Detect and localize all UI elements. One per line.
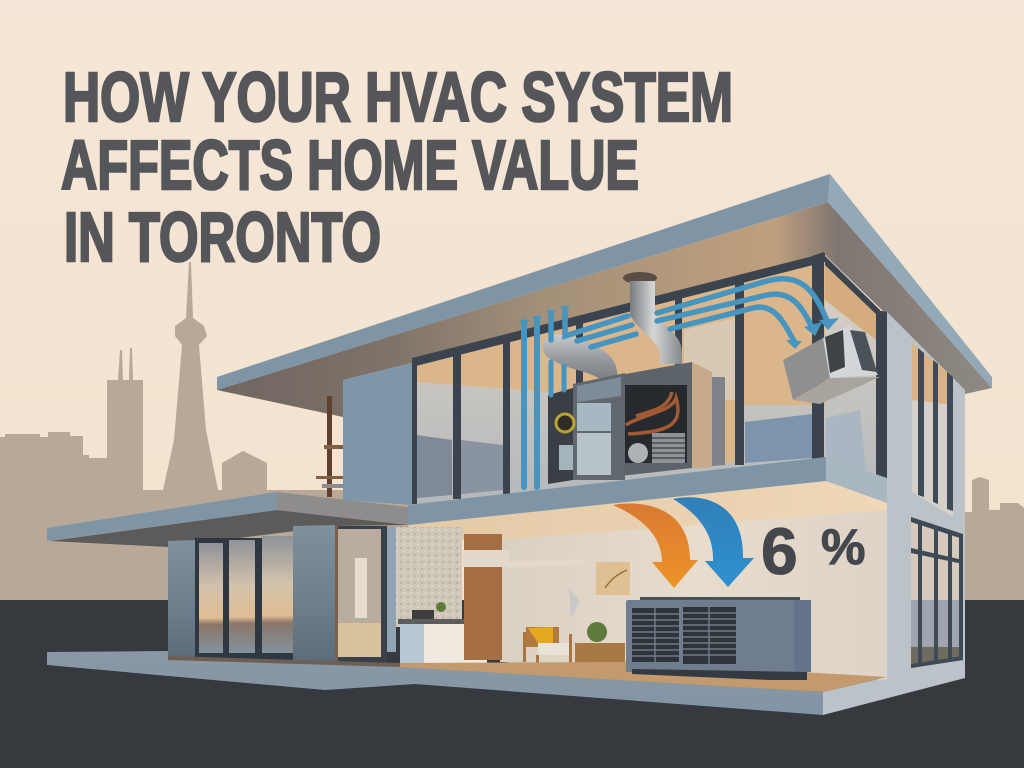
percentage text: %: [821, 519, 865, 575]
window mullions: [412, 252, 887, 504]
wood panel: [464, 534, 502, 660]
background sky: [0, 0, 1024, 600]
blue arrow down: [673, 497, 754, 587]
left canopy: [47, 492, 408, 547]
lower ceiling: [408, 481, 887, 540]
kitchen shelf plant: [398, 602, 488, 624]
compressor sphere: [628, 443, 648, 463]
mid slab right side: [826, 457, 887, 503]
cabinet grille: [652, 433, 685, 463]
furnace unit: [543, 272, 725, 484]
condenser right end panel: [794, 600, 811, 672]
condenser top: [640, 597, 800, 600]
upper floor gray wall block: [343, 363, 412, 505]
slab body: [47, 651, 823, 715]
front panels: [559, 373, 625, 480]
condenser left grille: [632, 608, 679, 662]
lower side windows: [911, 517, 963, 668]
armchair: [523, 627, 572, 663]
floor slab: [47, 651, 887, 715]
blue air ducts: [524, 279, 827, 487]
percentage text: 6: [761, 514, 798, 588]
upper side windows: [912, 343, 953, 517]
blue wall strip: [387, 527, 396, 652]
title: IN TORONTO: [64, 198, 381, 276]
condenser base: [632, 669, 807, 680]
title: AFFECTS HOME VALUE: [61, 126, 639, 204]
framed wall art: [596, 562, 630, 595]
roof soffit: [217, 202, 992, 417]
furnace right beige panel: [692, 362, 712, 468]
duct arrow tips: [519, 306, 839, 349]
balcony rack: [316, 396, 343, 497]
wall air handler: [783, 325, 880, 404]
orange arrow down: [613, 504, 698, 588]
upper windows glazing: [412, 255, 887, 505]
furnace right cabinet: [620, 362, 692, 476]
upper room interior furniture: [417, 410, 866, 498]
kitchen counter: [400, 624, 487, 663]
burner cabinet interior: [625, 385, 687, 463]
corner glazing with sofa: [335, 526, 387, 662]
furnace right gray side: [712, 377, 725, 466]
house cutaway: [47, 174, 992, 715]
outdoor condenser unit: [626, 597, 811, 680]
condenser body: [626, 600, 811, 672]
ground band: [0, 600, 1024, 768]
lower left walls: [168, 540, 195, 658]
roof right fascia: [828, 174, 992, 388]
roof front fascia: [217, 174, 830, 390]
porch wood edge: [168, 656, 400, 667]
wood floor strip: [400, 662, 887, 692]
wall vent: [569, 588, 580, 618]
right side wall: [823, 312, 965, 715]
lower room wall: [500, 510, 887, 680]
side table with plant: [575, 622, 625, 665]
lower left sliding windows: [195, 536, 293, 660]
warm reflection in glazing: [412, 255, 825, 405]
stone feature wall: [396, 527, 462, 627]
condenser right grille: [683, 607, 736, 664]
hood shelf: [463, 550, 583, 568]
percentage text: [761, 514, 865, 588]
furnace left cabinet: [548, 388, 573, 484]
Toronto skyline silhouette: [0, 262, 1024, 600]
furnace flue pipes: [543, 272, 682, 378]
mid floor slab front: [408, 457, 826, 525]
title: [61, 58, 733, 276]
copper coils: [626, 392, 678, 434]
gold gear: [556, 414, 574, 432]
title: HOW YOUR HVAC SYSTEM: [63, 58, 733, 136]
